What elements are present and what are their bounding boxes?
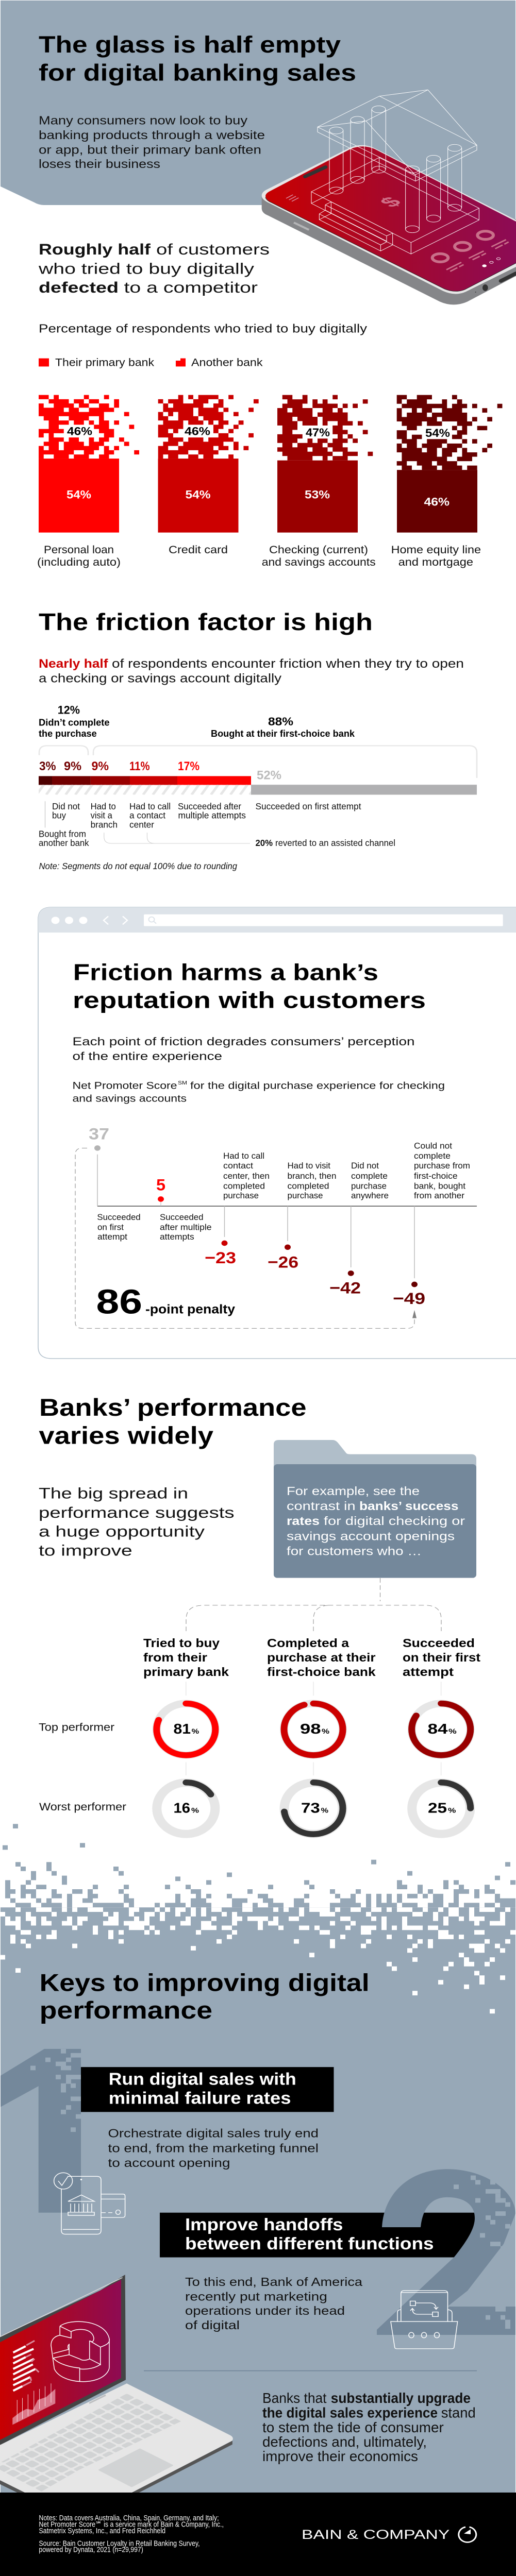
key 1: text [108, 2127, 319, 2170]
segment values: 11% [129, 759, 149, 773]
segment labels: 20% [256, 838, 273, 848]
logo [302, 2527, 476, 2542]
icon: process machine [391, 2291, 458, 2349]
illustration: phone with wireframe bank: $ [374, 194, 407, 210]
key 2: heading text [185, 2215, 434, 2253]
bar chart: primary vs another bank [37, 397, 502, 568]
column headings: first-choice bank [267, 1666, 376, 1679]
point: bought from another [393, 1141, 470, 1308]
point: did not complete: Did not [351, 1161, 379, 1171]
column headings: primary bank [143, 1666, 229, 1679]
heading: friction harms [73, 959, 426, 1013]
point: multiple attempts: 5 [156, 1176, 165, 1194]
bar: personal loan: Personal loan [44, 544, 114, 555]
point: bought from another: from another [414, 1191, 464, 1200]
point: multiple attempts: attempts [160, 1232, 194, 1242]
bar: personal loan: (including auto) [37, 556, 121, 568]
text block: conclusion: improve their economics [262, 2449, 418, 2465]
notes and source: Satmetrix Systems, Inc., and Fred Reichheld [39, 2527, 165, 2535]
text block: intro: Many consumers now look to buy [39, 114, 248, 127]
text block: each point: Each point of friction degrades consumers’ perception [72, 1036, 414, 1048]
donut values: top performer: % [192, 1727, 199, 1736]
text block: big spread: to improve [39, 1541, 132, 1559]
column headings: attempt [403, 1666, 454, 1679]
text block: conclusion: substantially upgrade [331, 2391, 471, 2406]
bar: home equity and mortgage: and mortgage [398, 556, 473, 568]
bar: credit card: 46% [185, 425, 210, 437]
heading: keys: performance [40, 1996, 212, 2024]
row labels: Worst performer [39, 1801, 126, 1812]
heading: roughly half [38, 241, 270, 296]
heading: keys [40, 1969, 370, 2024]
callout: 86-point penalty [96, 1283, 235, 1321]
bar: credit card: Credit card [169, 544, 228, 555]
text block: nearly half: Nearly half [39, 657, 108, 671]
title [39, 32, 356, 86]
donut values: worst performer: % [191, 1806, 199, 1815]
donut values: top performer: 98 [300, 1722, 321, 1737]
notes and source: Net Promoter Score℠ is a service mark of Bain & Company, Inc., [39, 2520, 224, 2529]
point: succeeded first [89, 1125, 141, 1242]
numeral: 2 [377, 2169, 515, 2335]
callout: 86-point penalty: 86 [96, 1283, 142, 1321]
key 2: heading text: between different functions [185, 2234, 434, 2253]
key 2: text: operations under its head [185, 2304, 345, 2317]
segment values: 3% [39, 759, 56, 773]
key 2: heading text: Improve handoffs [185, 2215, 343, 2234]
bar: home equity and mortgage: 46% [424, 496, 450, 508]
point: visit branch: Had to visit [288, 1161, 330, 1171]
logo: BAIN & COMPANY [302, 2528, 450, 2542]
segment labels [39, 801, 395, 848]
notes and source: Notes: Data covers Australia, China, Spain, Germany, and Italy; [39, 2514, 219, 2522]
panel: footer [0, 2493, 516, 2576]
bar: credit card [158, 397, 259, 555]
notes and source: powered by Dynata, 2021 (n=29,997) [39, 2546, 143, 2554]
point: succeeded first: on first [97, 1222, 124, 1232]
notes and source [39, 2514, 224, 2554]
row labels [39, 1721, 126, 1812]
text block: big spread: The big spread in [39, 1485, 188, 1502]
point: contact center [205, 1151, 270, 1267]
label: didn't complete [39, 704, 110, 739]
chart subtitle: Percentage of respondents who tried to buy digitally [39, 323, 368, 335]
text block: conclusion: the digital sales experience [262, 2405, 438, 2421]
segment labels: Had to call [129, 801, 171, 811]
key 2: text [185, 2276, 362, 2332]
panel: hero background [1, 1, 515, 222]
point: contact center: −23 [205, 1249, 236, 1267]
point: multiple attempts [156, 1176, 212, 1242]
text block: big spread: performance suggests [39, 1504, 235, 1521]
segment values: 9% [64, 759, 81, 773]
chart: NPS penalty [75, 1125, 477, 1328]
label: didn't complete: Didn’t complete [39, 718, 110, 728]
callout: 86-point penalty: -point penalty [145, 1302, 235, 1316]
column headings: purchase at their [267, 1651, 376, 1665]
donut values: worst performer: 73 [301, 1801, 320, 1816]
column headings: on their first [403, 1651, 480, 1665]
key 1: heading box: Run digital sales with [109, 2070, 296, 2089]
browser toolbar [38, 907, 516, 933]
panel: browser window [38, 907, 516, 1359]
bar: home equity and mortgage: Home equity line [391, 544, 481, 555]
segment values: 52% [257, 769, 281, 782]
heading: roughly half: Roughly half [39, 241, 151, 258]
callout: folder: For example, see the [287, 1485, 420, 1498]
heading: keys: Keys to improving digital [40, 1969, 370, 1996]
notes and source: Source: Bain Customer Loyalty in Retail Banking Survey, [39, 2540, 200, 2548]
text block: intro: or app, but their primary bank often [39, 144, 261, 157]
point: bought from another: bank, bought [414, 1181, 465, 1191]
point: visit branch: completed [288, 1181, 329, 1191]
text block: conclusion [262, 2391, 476, 2465]
point: did not complete: purchase [351, 1181, 387, 1191]
segment labels: Had to [91, 801, 116, 811]
heading: banks' performance: Banks’ performance [39, 1394, 306, 1421]
donut values: top performer: % [322, 1727, 329, 1736]
segment labels: Succeeded after [178, 801, 241, 811]
title: The glass is half empty [39, 32, 341, 58]
segment values: 17% [178, 759, 199, 773]
bar: personal loan: 54% [66, 488, 91, 501]
callout: folder: savings account openings [287, 1530, 455, 1543]
text block: each point: of the entire experience [72, 1050, 222, 1063]
text block: big spread [39, 1485, 235, 1559]
segment values [39, 759, 281, 782]
donut values: top performer: % [448, 1727, 457, 1736]
point: did not complete: anywhere [351, 1191, 389, 1200]
label: bought at first choice [211, 715, 355, 739]
illustration: laptop [0, 2275, 233, 2495]
text block: conclusion: to stem the tide of consumer [262, 2420, 444, 2435]
panel: keys background with pixel dissolve [0, 1824, 515, 2493]
icon: phone with bank and card [54, 2173, 125, 2234]
text block: conclusion: stand [441, 2405, 476, 2421]
bar: credit card: 54% [185, 488, 211, 501]
segment labels: center [129, 820, 154, 829]
bar: checking and savings [262, 397, 376, 568]
donut values: worst performer [173, 1801, 456, 1816]
bar: checking and savings: Checking (current) [269, 544, 368, 555]
point: bought from another: purchase from [414, 1161, 470, 1171]
point: did not complete: −42 [329, 1279, 361, 1297]
heading: banks' performance: varies widely [39, 1421, 214, 1449]
donut values: top performer [173, 1722, 457, 1737]
key 1: heading box: minimal failure rates [109, 2088, 291, 2108]
heading: roughly half: who tried to buy digitally [38, 260, 254, 277]
text block: each point [72, 1036, 414, 1063]
heading: roughly half: to a competitor [124, 279, 258, 296]
key 2: text: of digital [185, 2319, 240, 2332]
bar: checking and savings: 47% [306, 426, 330, 439]
point: contact center: center, then [223, 1171, 270, 1181]
point: multiple attempts: Succeeded [160, 1212, 204, 1222]
label: bought at first choice: 88% [268, 715, 293, 727]
key 2: heading box [160, 2213, 475, 2257]
point: visit branch: purchase [288, 1191, 323, 1200]
segment labels: buy [52, 810, 66, 820]
bar: checking and savings: 53% [305, 488, 330, 501]
segment values: 9% [92, 759, 109, 773]
bar: checking and savings: and savings accounts [262, 556, 376, 568]
donut charts: top performer [157, 1703, 471, 1755]
point: did not complete [329, 1161, 389, 1297]
donut values: worst performer: 25 [428, 1801, 447, 1816]
chart subtitle: NPS: for the digital purchase experience for checking [190, 1080, 445, 1091]
donut values: worst performer: % [448, 1806, 456, 1815]
point: contact center: Had to call [223, 1151, 264, 1161]
text block: nearly half: of respondents encounter friction when they try to open [112, 657, 464, 671]
donut charts: worst performer [157, 1783, 471, 1834]
point: visit branch: −26 [268, 1253, 298, 1272]
column headings [143, 1637, 480, 1679]
point: visit branch: branch, then [288, 1171, 336, 1181]
illustration: phone with wireframe bank [262, 90, 516, 304]
bar: personal loan [37, 397, 139, 568]
label: bought at first choice: Bought at their first-choice bank [211, 728, 355, 739]
segment labels: branch [91, 820, 118, 829]
segment labels: multiple attempts [178, 810, 246, 820]
segment labels: a contact [129, 810, 166, 820]
note: Note: Segments do not equal 100% due to rounding [39, 861, 237, 871]
bar: home equity and mortgage [391, 397, 502, 568]
point: bought from another: first-choice [414, 1171, 458, 1181]
column headings: Completed a [267, 1637, 349, 1650]
point: bought from another: −49 [393, 1290, 425, 1308]
point: contact center: purchase [223, 1191, 259, 1200]
point: visit branch [268, 1161, 336, 1272]
segment labels: another bank [39, 838, 89, 848]
text block: conclusion: Banks that [262, 2391, 326, 2406]
callout: folder [274, 1440, 476, 1578]
point: multiple attempts: after multiple [160, 1222, 212, 1232]
legend [39, 357, 263, 368]
heading: roughly half: of customers [156, 241, 270, 258]
text block: nearly half: a checking or savings account digitally [39, 672, 281, 685]
row labels: Top performer [39, 1721, 114, 1733]
key 1: text: to account opening [108, 2157, 230, 2170]
legend: Their primary bank [55, 357, 155, 368]
key 1: text: to end, from the marketing funnel [108, 2142, 319, 2155]
column headings: Succeeded [403, 1637, 475, 1650]
text block: nearly half [39, 657, 464, 685]
legend: Another bank [191, 357, 263, 368]
point: succeeded first: 37 [89, 1125, 109, 1143]
label: didn't complete: 12% [58, 704, 80, 716]
segment labels: Succeeded on first attempt [256, 801, 361, 811]
point: did not complete: complete [351, 1171, 388, 1181]
point: contact center: completed [223, 1181, 265, 1191]
text block: intro: loses their business [39, 158, 160, 171]
segment labels: Bought from [39, 829, 86, 839]
donut values: top performer: 84 [427, 1722, 448, 1737]
bar: personal loan: 46% [67, 425, 92, 437]
column headings: from their [143, 1651, 207, 1665]
key 1: text: Orchestrate digital sales truly end [108, 2127, 319, 2140]
heading: banks' performance [39, 1394, 306, 1449]
callout: folder: for digital checking or [324, 1515, 465, 1528]
segment labels: visit a [91, 810, 112, 820]
donut values: worst performer: % [321, 1806, 328, 1815]
text block: intro [39, 114, 265, 171]
bar: home equity and mortgage: 54% [425, 427, 450, 439]
segment labels: Did not [52, 801, 80, 811]
point: succeeded first: Succeeded [97, 1212, 141, 1222]
numeral: 1 [1, 2049, 81, 2213]
heading: friction harms: reputation with customers [73, 987, 426, 1013]
stacked bar [39, 776, 477, 795]
chart subtitle: NPS: and savings accounts [72, 1093, 187, 1104]
chart subtitle: NPS: Net Promoter Score [72, 1080, 177, 1091]
callout: folder: contrast in [287, 1500, 356, 1513]
point: contact center: contact [223, 1161, 253, 1171]
key 2: text: recently put marketing [185, 2291, 327, 2303]
point: bought from another: complete [414, 1151, 451, 1161]
key 2: text: To this end, Bank of America [185, 2276, 362, 2289]
callout: folder: rates [287, 1515, 320, 1528]
text block: big spread: a huge opportunity [39, 1523, 205, 1540]
text block: intro: banking products through a website [39, 129, 265, 142]
callout: folder: banks’ success [359, 1500, 458, 1513]
text block: conclusion: defections and, ultimately, [262, 2435, 427, 2450]
heading: friction factor: The friction factor is high [39, 608, 373, 635]
segment labels: reverted to an assisted channel [275, 838, 395, 848]
title: for digital banking sales [39, 60, 356, 86]
chart subtitle: NPS [72, 1080, 445, 1104]
heading: roughly half: defected [39, 279, 119, 296]
label: didn't complete: the purchase [39, 728, 97, 739]
donut values: top performer: 81 [173, 1722, 191, 1737]
point: succeeded first: attempt [97, 1232, 127, 1242]
heading: friction harms: Friction harms a bank’s [73, 959, 378, 985]
key 1: heading box [81, 2067, 334, 2112]
callout: folder: for customers who … [287, 1545, 422, 1558]
chart: friction funnel [39, 704, 477, 848]
donut values: worst performer: 16 [173, 1801, 190, 1816]
chart subtitle: NPS: SM [178, 1080, 187, 1086]
point: bought from another: Could not [414, 1141, 452, 1150]
column headings: Tried to buy [143, 1637, 220, 1650]
